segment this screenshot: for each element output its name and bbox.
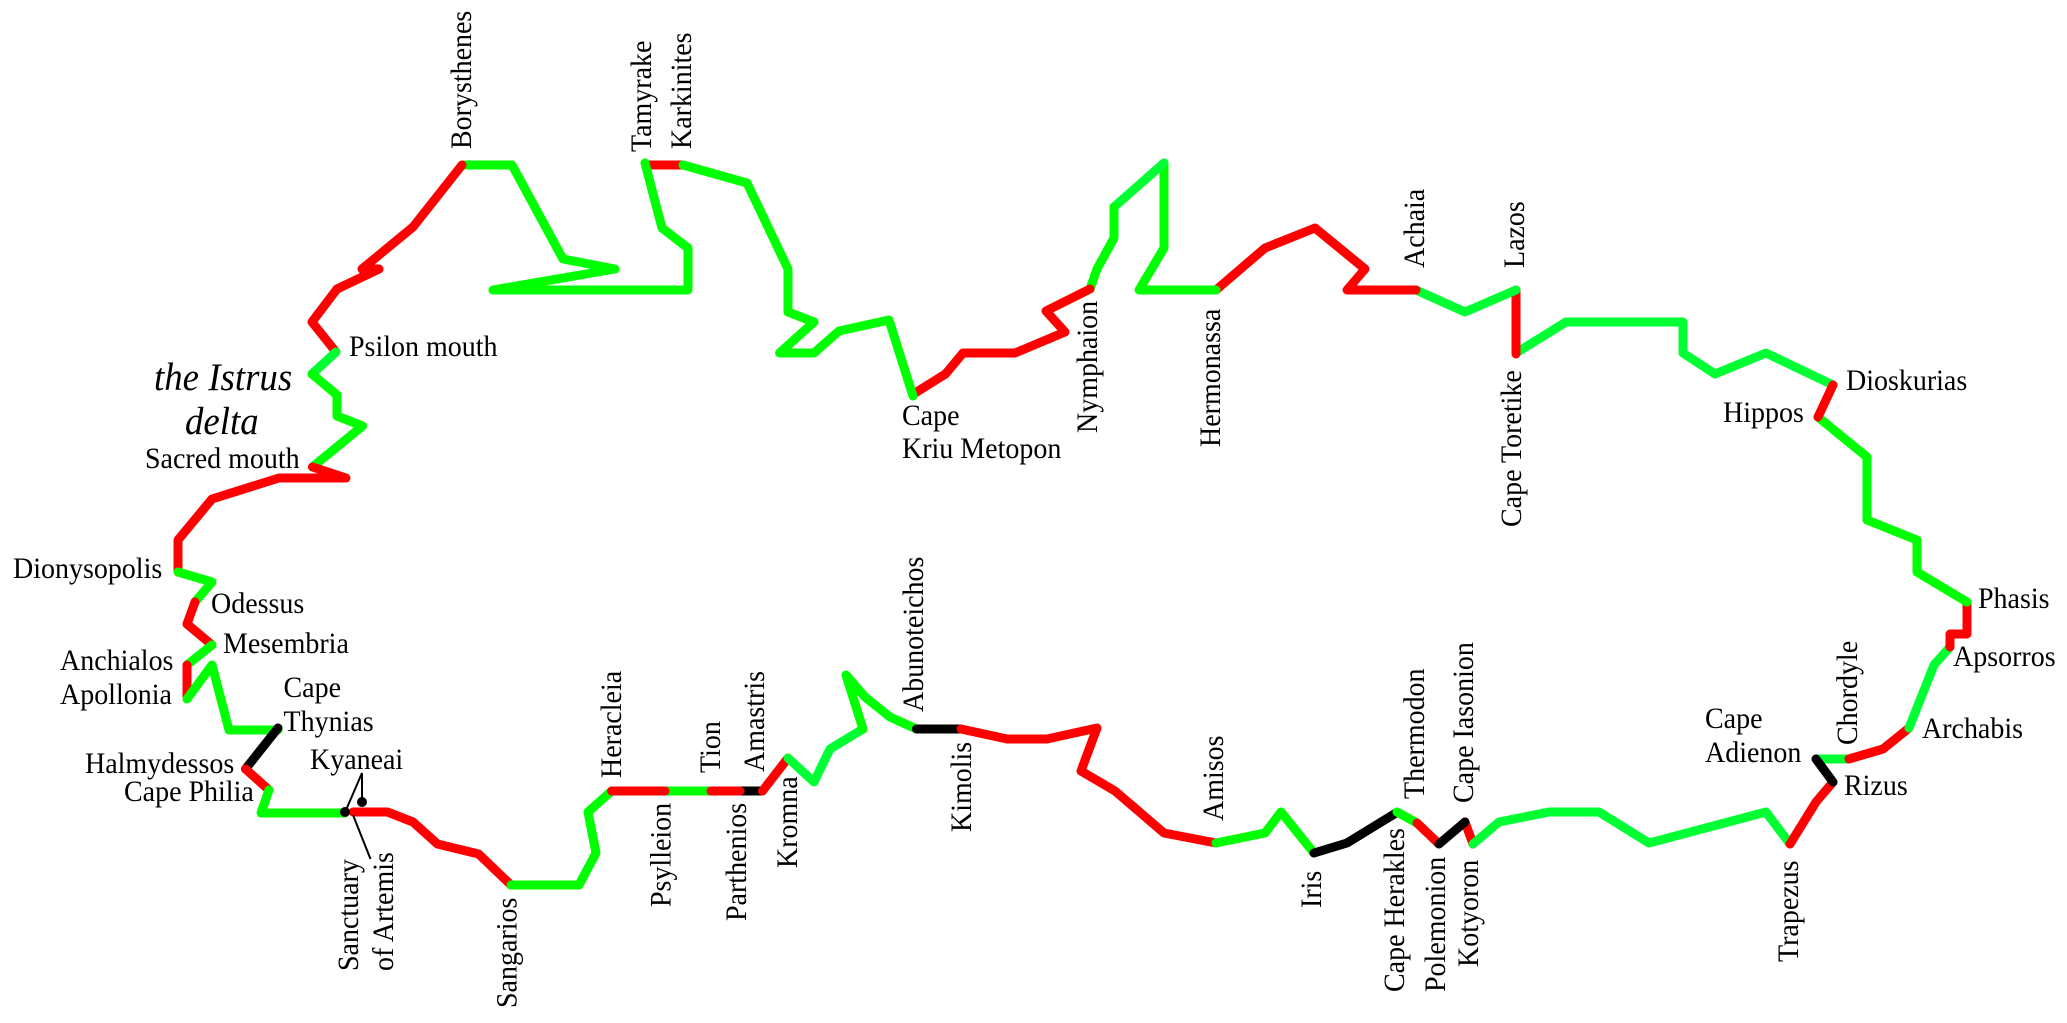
rotated place labels: Cape Herakles <box>1378 828 1411 992</box>
horizontal place labels: Kyaneai <box>310 743 403 776</box>
north-west coast segments <box>178 163 688 813</box>
horizontal place labels: Cape <box>1705 702 1762 735</box>
rotated place labels: Kimolis <box>945 742 978 832</box>
horizontal place labels: Cape <box>284 671 341 704</box>
horizontal place labels: Odessus <box>211 587 304 620</box>
horizontal place labels: Anchialos <box>60 644 173 677</box>
rotated place labels: Borysthenes <box>445 11 478 149</box>
north-east coast segments <box>683 163 1967 602</box>
rotated place labels: Sanctuary <box>332 859 365 971</box>
rotated place labels: Polemonion <box>1419 856 1452 992</box>
horizontal place labels: Apsorros <box>1953 640 2056 673</box>
rotated place labels: Tion <box>694 721 727 773</box>
rotated place labels: Sangarios <box>491 898 524 1008</box>
horizontal place labels: Dionysopolis <box>13 552 162 585</box>
horizontal place labels: delta <box>185 400 259 443</box>
rotated place labels <box>332 11 1864 1008</box>
horizontal place labels: Archabis <box>1922 712 2023 745</box>
rotated place labels: Thermodon <box>1398 668 1431 799</box>
horizontal place labels: Sacred mouth <box>145 442 300 475</box>
rotated place labels: Trapezus <box>1772 860 1805 962</box>
Kyaneai and Sanctuary of Artemis markers <box>340 773 370 859</box>
rotated place labels: Cape Iasonion <box>1447 642 1480 803</box>
rotated place labels: Parthenios <box>720 803 753 921</box>
rotated place labels: Kotyoron <box>1452 859 1485 967</box>
rotated place labels: Psylleion <box>645 802 678 907</box>
horizontal place labels: the Istrus <box>154 356 292 399</box>
horizontal place labels: Apollonia <box>60 678 172 711</box>
rotated place labels: Iris <box>1295 871 1328 908</box>
rotated place labels: Heracleia <box>595 671 628 778</box>
rotated place labels: Nymphaion <box>1071 300 1104 433</box>
horizontal place labels: Rizus <box>1844 769 1908 802</box>
horizontal place labels: Phasis <box>1978 582 2050 615</box>
rotated place labels: Amisos <box>1197 735 1230 821</box>
rotated place labels: Achaia <box>1398 189 1431 268</box>
horizontal place labels: Hippos <box>1723 396 1804 429</box>
rotated place labels: Karkinites <box>665 32 698 149</box>
rotated place labels: Amastris <box>738 671 771 772</box>
horizontal place labels: Thynias <box>284 705 374 738</box>
horizontal place labels: Halmydessos <box>85 747 234 780</box>
south coast segments <box>353 602 1967 885</box>
rotated place labels: Kromna <box>771 776 804 868</box>
horizontal place labels: Adienon <box>1705 736 1802 769</box>
rotated place labels: Cape Toretike <box>1495 370 1528 527</box>
rotated place labels: Chordyle <box>1831 641 1864 745</box>
rotated place labels: Lazos <box>1498 201 1531 268</box>
horizontal place labels: Cape Philia <box>124 775 254 808</box>
horizontal place labels <box>13 330 2056 808</box>
rotated place labels: Abunoteichos <box>897 557 930 712</box>
rotated place labels: Tamyrake <box>625 41 658 152</box>
horizontal place labels: Mesembria <box>223 627 349 660</box>
rotated place labels: Hermonassa <box>1194 309 1227 447</box>
horizontal place labels: Cape <box>902 399 959 432</box>
horizontal place labels: Psilon mouth <box>349 330 498 363</box>
coastline route map <box>178 163 1967 885</box>
rotated place labels: of Artemis <box>367 852 400 971</box>
horizontal place labels: Kriu Metopon <box>902 432 1062 465</box>
horizontal place labels: Dioskurias <box>1846 364 1967 397</box>
